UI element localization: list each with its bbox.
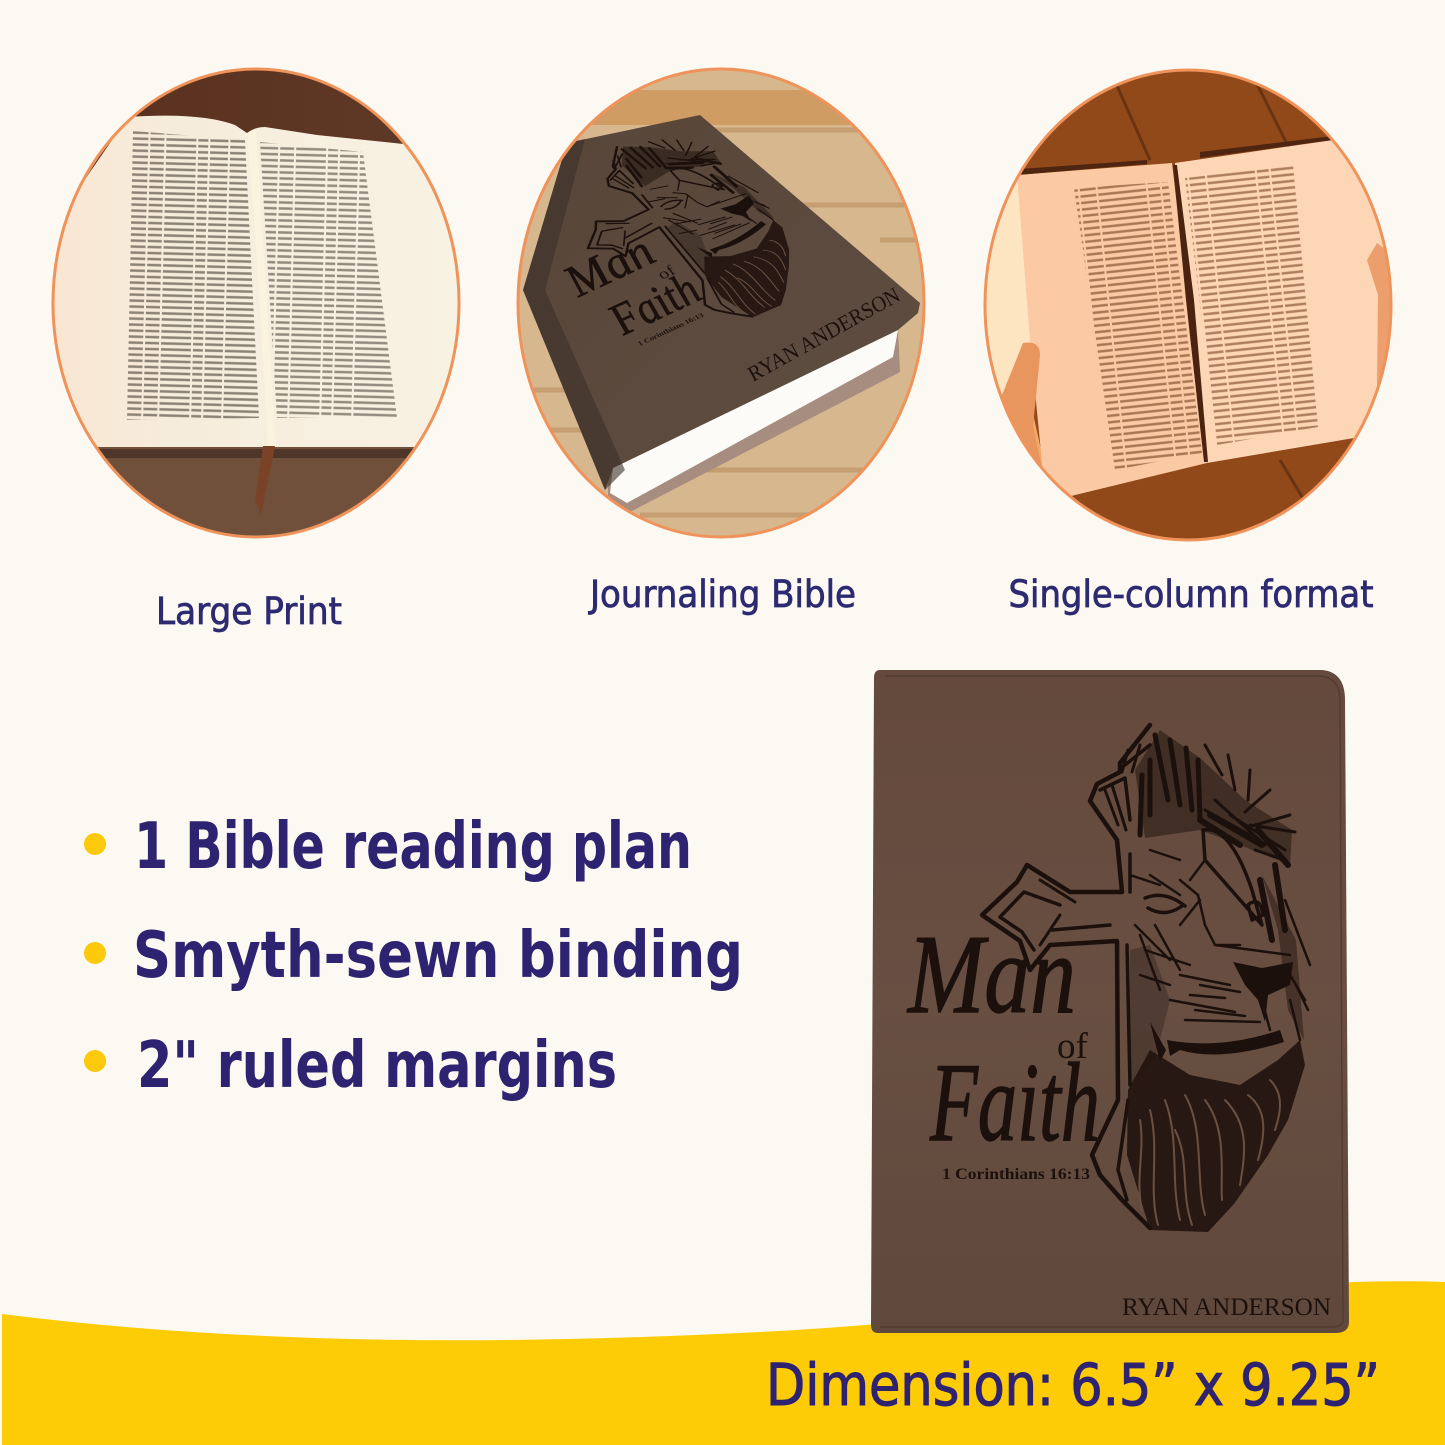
text block left: [1074, 182, 1202, 470]
caption: large print: Large Print: [156, 590, 342, 633]
left page: [1017, 163, 1207, 497]
page stack and hand side: [986, 180, 1030, 395]
photo: journaling bible closed: [515, 65, 930, 545]
feature: margins: 2" ruled margins: [137, 1029, 617, 1103]
engraved lion and cross: [982, 725, 1310, 1232]
caption: single-column format: Single-column format: [1008, 573, 1374, 616]
wood table: [1020, 72, 1354, 538]
gutter: [247, 132, 248, 133]
engraved name: RYAN ANDERSON: [743, 282, 904, 386]
ribbon marker: [255, 446, 275, 515]
engraved title: Faith: [596, 264, 711, 344]
feature: reading plan: 1 Bible reading plan: [134, 810, 692, 884]
engraved title: [563, 244, 704, 346]
white pages: [610, 330, 898, 503]
yellow wave footer: [2, 1281, 1445, 1445]
bullet 2: [84, 942, 106, 964]
bullet 1: [84, 833, 106, 855]
engraved of: of: [1057, 1026, 1088, 1067]
engraved man: Man: [906, 913, 1076, 1037]
text block right: [260, 142, 397, 418]
photo border: single-column: [985, 70, 1391, 540]
cover stitching: [880, 676, 1343, 1327]
cover base: [871, 670, 1349, 1333]
left thumb: [1002, 342, 1041, 464]
caption: journaling bible: Journaling Bible: [588, 573, 856, 616]
cover shadow side: [523, 139, 625, 490]
feature list: [84, 810, 743, 1103]
engraved faith: Faith: [929, 1041, 1100, 1165]
engraved name: RYAN ANDERSON: [1122, 1294, 1331, 1321]
text block left: [127, 131, 259, 420]
text block right: [1185, 165, 1318, 445]
page underside shadow: [90, 449, 430, 458]
photo: large print open bible: [50, 65, 462, 545]
engraved verse: 1 Corinthians 16:13: [942, 1166, 1090, 1183]
engraved lion: [586, 139, 789, 318]
engraved title: Man: [551, 227, 666, 306]
right page: [1175, 140, 1395, 463]
wood table: [515, 65, 927, 545]
photo: single-column format: [985, 68, 1395, 542]
page edge: [608, 330, 900, 512]
top page shadow: [1017, 136, 1333, 175]
feature: binding: Smyth-sewn binding: [133, 919, 743, 993]
right thumb: [1367, 243, 1390, 385]
photo border: journaling bible: [518, 69, 924, 537]
leather cover: [523, 115, 920, 490]
dimension label: Dimension: 6.5” x 9.25”: [766, 1351, 1380, 1419]
bullet 3: [84, 1050, 106, 1072]
wood table: [86, 70, 403, 178]
open pages: [50, 116, 462, 447]
bible cover: [871, 670, 1349, 1333]
photo border: large print: [53, 69, 459, 537]
gutter: [1173, 165, 1208, 462]
engraved title: 1 Corinthians 16:13: [636, 311, 706, 347]
engraved title: of: [653, 262, 679, 283]
